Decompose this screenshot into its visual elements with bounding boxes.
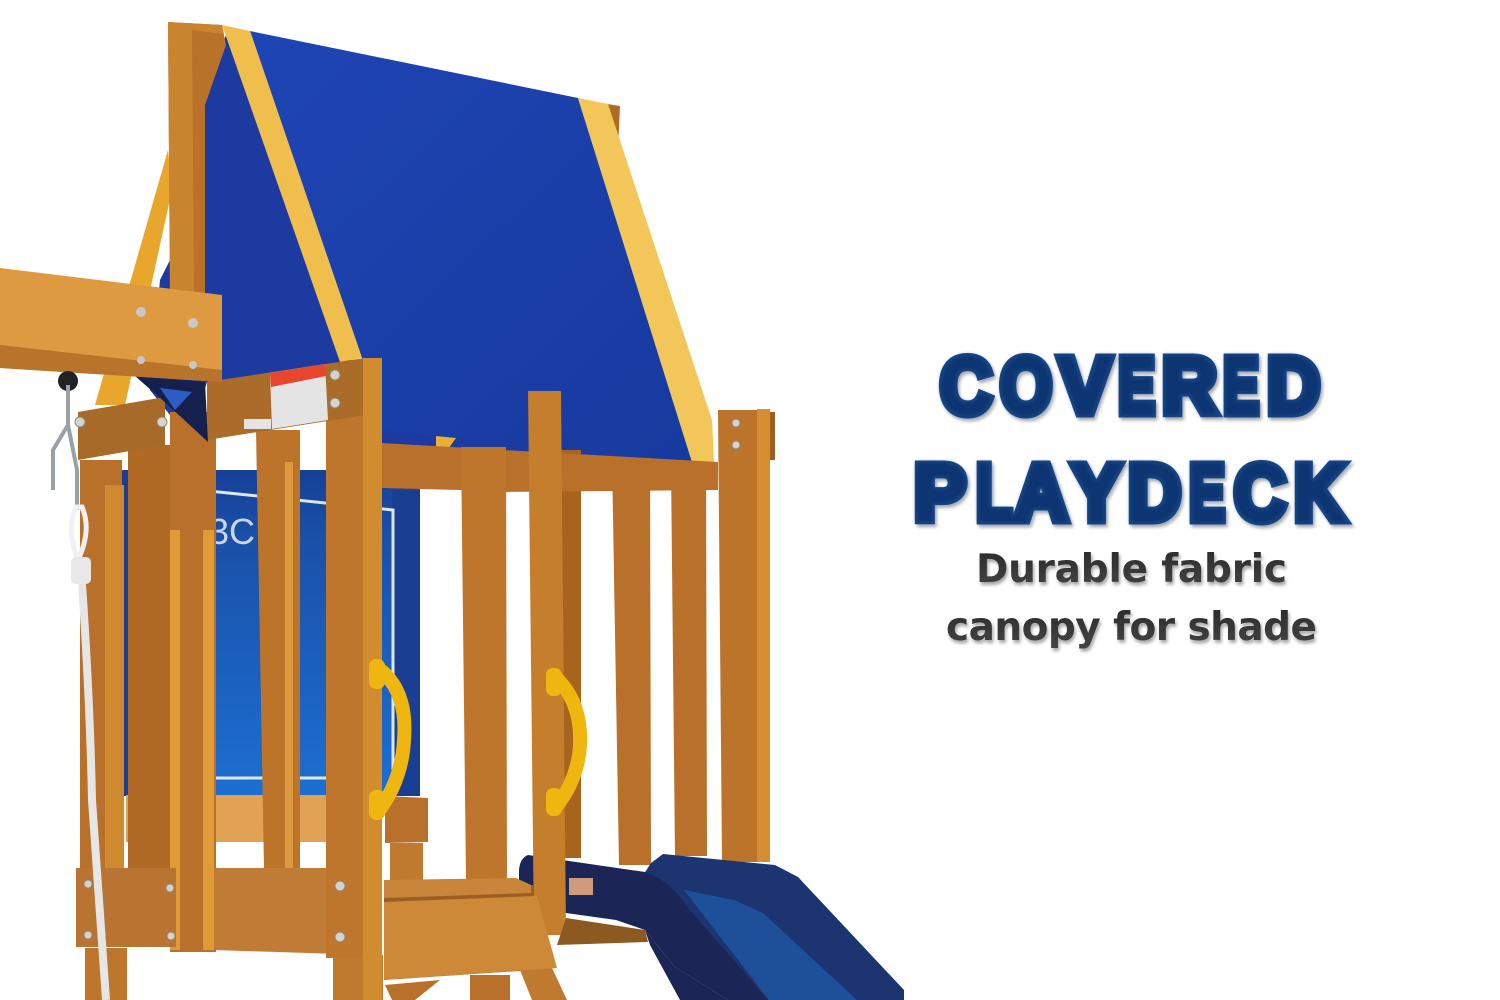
heading: covered playdeck: C <box>1234 448 1286 537</box>
heading: covered playdeck: R <box>1162 341 1217 430</box>
heading: covered playdeck: L <box>976 448 1012 537</box>
left deck wall <box>76 358 383 1000</box>
front deck post and steps <box>384 391 648 1000</box>
heading: covered playdeck: K <box>1294 448 1345 537</box>
heading: covered playdeck: E <box>1223 341 1259 430</box>
heading: covered playdeck: C <box>940 341 992 430</box>
warning label <box>244 364 328 429</box>
subheading: canopy for shade <box>946 605 1317 650</box>
subheading: Durable fabric <box>976 547 1287 592</box>
heading: covered playdeck: D <box>1267 341 1320 430</box>
heading: covered playdeck: V <box>1059 341 1111 430</box>
bolts <box>75 370 740 942</box>
canopy roof <box>222 25 714 462</box>
canopy rear post <box>168 22 620 295</box>
heading: covered playdeck: E <box>1118 341 1155 430</box>
playset illustration <box>0 22 904 1000</box>
heading: covered playdeck: O <box>1000 341 1052 430</box>
heading: covered playdeck: P <box>914 448 966 537</box>
right side slats <box>380 409 775 879</box>
heading: covered playdeck: A <box>1014 448 1068 537</box>
heading: covered playdeck: E <box>1189 448 1225 537</box>
back yellow roof slat <box>95 150 172 405</box>
subheading <box>946 547 1317 650</box>
blue wall banner <box>122 470 420 796</box>
heading: covered playdeck: Y <box>1072 448 1121 537</box>
slide <box>519 854 904 1000</box>
heading: covered playdeck: D <box>1128 448 1181 537</box>
canopy side panel <box>150 35 352 440</box>
slide tag <box>569 878 593 895</box>
rope and chain <box>53 371 106 1000</box>
swing beam <box>0 268 222 382</box>
heading: covered playdeck <box>914 341 1345 537</box>
back wood rail <box>126 795 330 842</box>
blue wall banner: 3C <box>209 511 255 552</box>
yellow handles <box>369 659 580 820</box>
